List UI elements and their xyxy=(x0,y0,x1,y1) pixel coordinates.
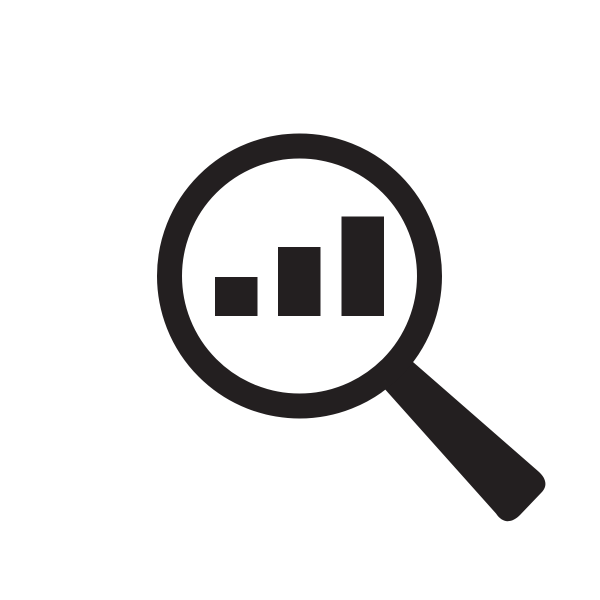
bar: short xyxy=(215,277,258,316)
bar: tall xyxy=(342,216,384,316)
bar: medium xyxy=(278,247,320,316)
icon: magnifying glass handle xyxy=(375,350,545,521)
icon: magnifying glass lens ring xyxy=(170,146,430,406)
bar chart xyxy=(215,216,384,316)
